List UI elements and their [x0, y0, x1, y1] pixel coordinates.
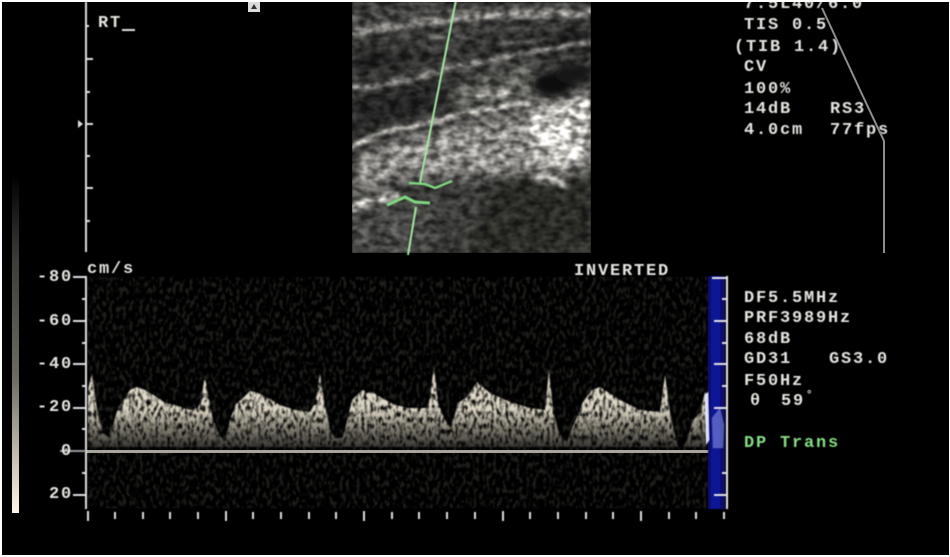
settings readout: Doppler: GS3.0: [829, 350, 889, 369]
settings readout: Doppler: 68dB: [744, 330, 792, 349]
label: RT: [98, 14, 135, 33]
velocity scale: cm/s: [87, 260, 135, 279]
Doppler spectral waveform: [88, 365, 708, 447]
settings readout: B-mode: (TIB 1.4): [734, 38, 842, 57]
settings readout: B-mode: [734, 0, 890, 140]
settings readout: Doppler: 59: [781, 392, 805, 411]
grey scale bar: [12, 175, 19, 513]
velocity scale: -60: [37, 312, 73, 331]
time axis ticks: [87, 511, 725, 521]
orientation marker: [248, 2, 260, 12]
settings readout: B-mode: 77fps: [830, 121, 890, 140]
sector depth curve: [822, 8, 884, 253]
settings readout: Doppler: [744, 289, 889, 411]
right velocity axis: [712, 276, 728, 509]
ultrasound B-mode image: [352, 2, 591, 253]
settings readout: B-mode: 100%: [744, 80, 792, 99]
label: DP Trans: DP Trans: [744, 434, 840, 453]
settings readout: Doppler: °: [806, 390, 814, 402]
blue live marker bar: [705, 276, 725, 509]
settings readout: B-mode: 14dB: [744, 100, 792, 119]
settings readout: Doppler: DF5.5MHz: [744, 289, 840, 308]
settings readout: Doppler: F50Hz: [744, 372, 804, 391]
settings readout: Doppler: θ: [750, 392, 762, 411]
dark vessel shadow: [533, 64, 591, 96]
Doppler background speckle: [88, 277, 708, 508]
settings readout: B-mode: RS3: [830, 100, 866, 119]
velocity scale: -20: [37, 398, 73, 417]
label: RT: RT: [98, 14, 122, 33]
velocity scale: 0: [61, 442, 73, 461]
velocity scale: [37, 260, 135, 509]
settings readout: B-mode: TIS 0.5: [744, 16, 828, 35]
velocity scale: 20: [49, 485, 73, 504]
velocity scale: -40: [37, 355, 73, 374]
settings readout: Doppler: PRF3989Hz: [744, 309, 852, 328]
velocity axis zero baseline: [86, 450, 710, 453]
settings readout: Doppler: GD31: [744, 350, 792, 369]
velocity scale: -80: [37, 268, 73, 287]
label: INVERTED: INVERTED: [574, 262, 670, 281]
settings readout: B-mode: 4.0cm: [744, 121, 804, 140]
Doppler sample line and gate: [387, 0, 456, 255]
depth scale axis: [78, 2, 93, 252]
settings readout: B-mode: CV: [744, 58, 768, 77]
